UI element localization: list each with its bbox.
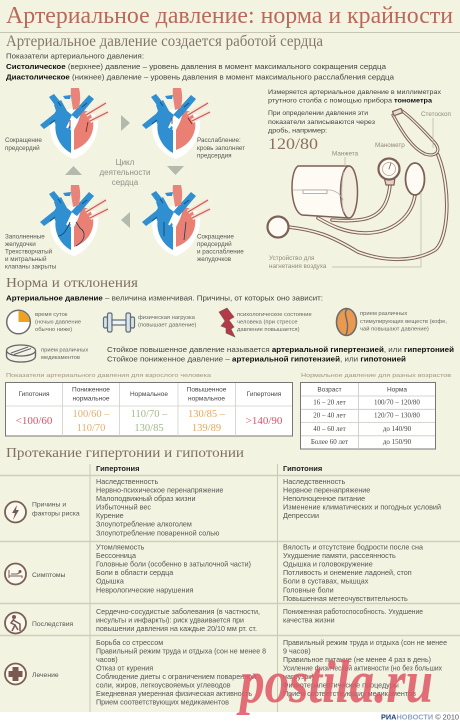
icon: heart, ventricles filled (40, 185, 108, 256)
row: symptoms: Потливость и онемение ладоней, стоп (283, 568, 412, 577)
icon: heart, relaxation (142, 88, 210, 159)
credit: РИАНОВОСТИ © 2010 (381, 714, 459, 722)
table: age norms: 20 – 40 лет (313, 412, 346, 420)
caption: ventricles filled: и митральный (5, 255, 47, 263)
caption: relaxation (197, 136, 245, 160)
factor: stimulants: стимулирующих веществ (кофе, (360, 319, 447, 325)
tonometer text: ртутного столба с помощью прибора тонометра (268, 96, 432, 104)
row: treatment: соли, жиров, легкоусвояемых углеводов (96, 681, 231, 690)
table: age norms: Возраст (317, 386, 342, 394)
row: treatment: часов) (96, 655, 118, 664)
tonometer illustration (268, 108, 447, 259)
row: causes: Злоупотребление поваренной солью (96, 528, 220, 537)
row: causes: Наследственность (283, 477, 345, 486)
icon: clock (7, 310, 30, 334)
column headers: Гипертония (96, 464, 140, 473)
row: causes: Неполноценное питание (283, 494, 365, 503)
caption: ventricles contracting: и расслабление (197, 248, 244, 256)
tonometer text: показатели записываются через (268, 119, 375, 126)
bulb (406, 163, 424, 195)
table header: Пониженное (72, 387, 110, 394)
row: causes: Нервно-психическое перенапряжение (96, 486, 223, 494)
row: consequences: повышении давления на каждые 20/10 мм рт. ст. (96, 624, 257, 633)
table: age norms: 120/70 – 130/80 (374, 412, 420, 420)
table: age norms: 40 – 60 лет (313, 425, 346, 433)
row: treatment: Правильный режим труда и отдыха (сон не менее 8 (96, 646, 266, 655)
tonometer labels (269, 111, 451, 270)
section heading: heart: Артериальное давление создается работой сердца (6, 33, 323, 50)
table header: нормальное (73, 396, 110, 403)
row: treatment: Борьба со стрессом (96, 638, 163, 647)
stethoscope ear tubes (393, 108, 438, 155)
row: causes: Злоупотребление алкоголем (96, 520, 192, 529)
tonometer labels: Устройство для (269, 254, 314, 262)
cuff (292, 166, 358, 218)
caption: ventricles contracting: предсердий (197, 240, 232, 248)
table: age norms (300, 382, 436, 449)
section heading: course: Протекание гипертонии и гипотонии (6, 445, 244, 460)
manometer tube (332, 185, 390, 221)
row: consequences: Сердечно-сосудистые заболевания (в частности, (96, 607, 260, 616)
factor: psychological state: психологическое состояние (237, 312, 312, 318)
table values: >140/90 (246, 415, 283, 427)
row: causes: Курение (96, 511, 124, 520)
tonometer labels: нагнетания воздуха (269, 263, 327, 270)
row: causes: Нервное перенапряжение (283, 486, 370, 494)
table: age norms: до 140/90 (383, 425, 412, 433)
row: symptoms: Утомляемость (96, 542, 145, 551)
table: adult pressure (6, 382, 292, 436)
tonometer labels: Манжета (332, 150, 359, 158)
factor: stimulants: прием различных (360, 311, 407, 317)
caption: ventricles filled: клапаны закрыты (5, 264, 57, 270)
table header: Гипотония (18, 391, 50, 398)
factor: stimulants (336, 308, 447, 336)
arrow: right (121, 115, 130, 131)
factor: psychological state (219, 308, 312, 337)
caption: ventricles contracting (197, 234, 244, 263)
row: treatment: Ежедневная умеренная физическая активность (96, 689, 252, 698)
row: treatment: нагрузок) (283, 672, 314, 681)
chest piece (268, 216, 288, 238)
icon: lightning (219, 308, 235, 337)
table header (18, 387, 282, 403)
icon: person with cane (5, 612, 26, 634)
row: treatment: Физиотерапевтические процедуры (283, 681, 399, 690)
caption: ventricles filled: Заполненные (5, 234, 45, 240)
tonometer text: дробь, например: (268, 126, 327, 134)
caption: adult table: Показатели артериального давления для взрослого человека (6, 373, 212, 379)
row: treatment (5, 638, 447, 707)
caption: ventricles contracting: желудочков (197, 256, 232, 263)
icon: medical cross (5, 664, 26, 684)
row: causes: Избыточный вес (96, 502, 151, 512)
factor: time of day (7, 310, 81, 334)
icon: dumbbell (104, 313, 134, 332)
row: causes: факторы риска (32, 511, 80, 518)
column headers (96, 464, 322, 473)
caption: atrial contraction (5, 137, 42, 152)
definitions of hypertension and hypotension (107, 345, 454, 364)
table: age norms: 16 – 20 лет (313, 398, 346, 406)
table header: Повышенное (187, 387, 227, 394)
row: treatment: Правильное питание (не менее 4 раз в день) (283, 655, 431, 664)
intro text block: Показатели артериального давления: (6, 52, 144, 60)
intro text block: Систолическое (верхнее) давление – уровень давления в момент максимального сокращения сердца (6, 62, 387, 71)
row: treatment: Соблюдение диеты с ограничением поваренной (96, 672, 256, 681)
icon: heart, ventricles contracting (142, 185, 210, 256)
tonometer text: Измеряется артериальное давление в миллиметрах (268, 89, 442, 96)
table: age norms: до 150/90 (383, 438, 412, 446)
row: treatment: Прием соответствующих медикаментов (283, 689, 416, 698)
icon: pill (6, 345, 36, 362)
row: consequences: Пониженная работоспособность. Ухудшение (283, 607, 423, 616)
row: symptoms: Неврологические нарушения (96, 585, 193, 594)
cycle label (99, 158, 151, 187)
table values: 130/85 (134, 423, 164, 434)
caption: relaxation: кровь заполняет (197, 145, 245, 152)
tonometer labels: Стетоскоп (421, 111, 451, 118)
row: symptoms: Головные боли (283, 585, 334, 594)
factor: medication (6, 345, 88, 362)
factor: time of day: (ночью давление (35, 320, 81, 326)
table values (16, 409, 283, 434)
row: symptoms: Симптомы (32, 572, 66, 579)
table header: Гипертония (247, 391, 282, 398)
row: symptoms: Одышка и головокружение (283, 560, 373, 569)
row: causes (5, 477, 441, 537)
row: symptoms: Боли в суставах, мышцах (283, 577, 369, 586)
comparison table (0, 464, 460, 712)
factor: psychological state: человека (при стрессе (237, 320, 298, 326)
caption: age table: Нормальное давление для разных возрастов (301, 373, 451, 379)
row: symptoms: Ухудшение памяти, рассеянность (283, 551, 396, 560)
stethoscope tube (288, 155, 447, 259)
row: treatment: Лечение (32, 672, 59, 679)
table values: 100/60 – (72, 409, 110, 420)
row: treatment: Правильный режим труда и отдыха (сон не менее (283, 638, 447, 647)
arrow: left (121, 212, 130, 228)
manometer (378, 158, 400, 185)
factor: physical load: физическая нагрузка (138, 315, 196, 321)
arrow: up (65, 166, 82, 175)
table values: <100/60 (16, 415, 53, 427)
row: causes: Малоподвижный образ жизни (96, 494, 195, 503)
table values: 110/70 – (131, 409, 168, 420)
row: consequences (5, 607, 423, 634)
row: treatment: 9 часов) (283, 646, 311, 655)
intro text block (6, 52, 395, 82)
row: consequences: качества жизни (283, 616, 335, 625)
factor: physical load (104, 313, 197, 332)
row: causes: Депрессии (283, 511, 319, 520)
factor: psychological state: давление повышается) (237, 327, 300, 333)
table: age norms: Норма (387, 386, 407, 394)
intro text block: Диастолическое (нижнее) давление – уровень давления в момент максимального расслабления сердца (6, 72, 395, 82)
table header: Нормальное (130, 391, 168, 398)
cycle label: Цикл (116, 158, 135, 167)
caption: ventricles filled: Трехстворчатый (5, 248, 53, 256)
row: treatment: Прием соответствующих медикаментов (96, 698, 229, 707)
bulb tube (318, 195, 415, 233)
icon: lightning circle (5, 502, 26, 522)
definitions of hypertension and hypotension: Стойкое пониженное давление – артериальной гипотензией , или гипотонией (107, 355, 406, 364)
column headers: Гипотония (283, 464, 322, 473)
factor: stimulants: чай повышают давление) (360, 326, 429, 332)
table values: 110/70 (77, 423, 105, 434)
row: consequences: Последствия (32, 621, 74, 628)
row: symptoms (5, 542, 423, 603)
row: causes: Изменение климатических и погодных условий (283, 502, 441, 512)
factor: time of day: время суток (35, 312, 68, 318)
row: symptoms: Боли в области сердца (96, 568, 173, 577)
caption: atrial contraction: Сокращение (5, 137, 42, 144)
cycle label: сердца (112, 178, 139, 187)
table values: 130/85 – (188, 409, 226, 420)
icon: coffee bean (336, 308, 356, 336)
pressure value: 120/80 (268, 136, 318, 153)
table header: нормальное (188, 396, 225, 403)
caption: ventricles filled: желудочки (5, 241, 36, 248)
factor: physical load: (повышает давление) (138, 322, 197, 328)
heart cycle diagram (5, 88, 245, 270)
definitions of hypertension and hypotension: Стойкое повышенное давление называется артериальной гипертензией , или гипертонией (107, 345, 454, 354)
row: symptoms: Повышенная метеочувствительность (283, 594, 408, 603)
tonometer text (268, 89, 442, 134)
icon: heart, atrial contraction (40, 88, 108, 159)
arrow: down (167, 166, 184, 175)
row: symptoms: Головные боли (особенно в затылочной части) (96, 560, 251, 569)
row: treatment: Отказ от курения (96, 664, 153, 672)
row: consequences: инсульты и инфаркты): риск удваивается при (96, 616, 244, 625)
title: Артериальное давление: норма и крайности (6, 3, 453, 29)
row: causes: Причины и (32, 502, 66, 509)
row: symptoms: Вялость и отсутствие бодрости после сна (283, 542, 423, 551)
caption: relaxation: Расслабление: (197, 136, 241, 144)
table: age norms: Более 60 лет (311, 438, 348, 446)
row: symptoms: Одышка (96, 577, 124, 586)
row: causes: Наследственность (96, 477, 158, 486)
tonometer labels: Манометр (375, 142, 405, 149)
row: symptoms: Бессонница (96, 551, 136, 560)
factor: time of day: обычно ниже) (35, 327, 72, 333)
table values: 139/89 (192, 423, 221, 434)
cycle label: деятельности (99, 168, 151, 177)
caption: ventricles contracting: Сокращение (197, 234, 234, 240)
caption: atrial contraction: предсердий (5, 144, 40, 152)
table: age norms: 100/70 – 120/80 (374, 398, 420, 406)
norm intro text: Артериальное давление – величина изменчивая. Причины, от которых оно зависит: (6, 294, 323, 302)
row: treatment: Усиление физической активности (но без больших (283, 664, 442, 672)
section heading: norm: Норма и отклонения (6, 275, 138, 290)
factor: medication: медикаментов (41, 355, 80, 361)
caption: relaxation: предсердия (197, 152, 232, 160)
caption: ventricles filled (5, 234, 57, 270)
icon: person in bed (5, 564, 26, 584)
factor: medication: прием различных (41, 348, 88, 354)
tonometer text: При определении давления эти (268, 110, 368, 117)
